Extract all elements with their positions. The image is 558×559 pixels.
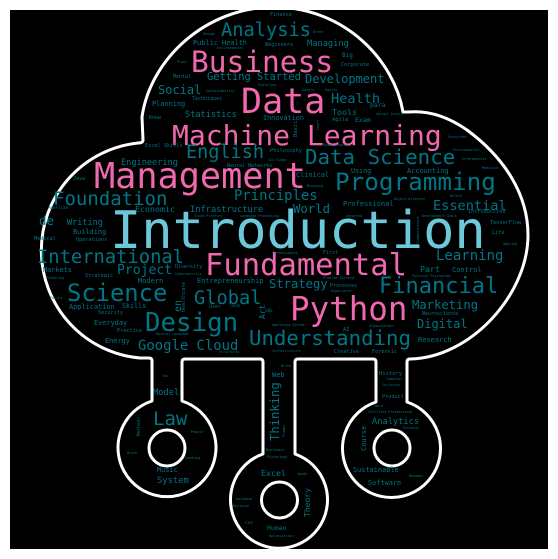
teal words: small: Software (368, 479, 401, 487)
teal words: tiny: History (379, 371, 403, 377)
teal words: tiny: AI (343, 327, 350, 333)
teal words: tiny: Techniques (192, 96, 222, 102)
teal words: medium: Learning (436, 248, 503, 264)
teal words: micro: Experience (331, 289, 351, 293)
teal words: micro: Sustainability (206, 89, 235, 93)
teal words: tiny: Processes (330, 283, 357, 289)
teal words: tiny: Excel Skills (145, 143, 182, 149)
teal words: micro: Ecosystem (448, 135, 466, 139)
teal words: small: Everyday (94, 319, 127, 327)
teal words: micro: Equity (325, 88, 337, 92)
teal words: tiny: Know (149, 115, 162, 121)
teal words: medium: Strategy (269, 277, 328, 291)
teal words: micro: Medicine (482, 166, 498, 170)
teal words: small: System (157, 476, 189, 486)
teal words: small: Professional (343, 200, 394, 208)
teal words: micro: Applied (503, 242, 517, 246)
teal words: small: Economic (135, 204, 175, 214)
teal words: small: Statistics (185, 110, 237, 120)
teal words: micro: Natural Language (156, 332, 189, 336)
teal words: small: Building (73, 228, 106, 236)
teal words: micro: Plant (177, 60, 187, 64)
pink word: Data: Data (241, 82, 325, 122)
teal words: small: para (370, 101, 386, 109)
pink word: Fundamental: Fundamental (205, 248, 407, 283)
teal words: tiny: Neural Networks (227, 163, 272, 169)
teal words: medium: Principles (234, 188, 318, 204)
teal words: small: Writing (67, 218, 103, 228)
teal words: micro: Language Processing (240, 214, 279, 218)
teal words: micro: Cloud Platform (194, 214, 223, 218)
teal words: medium (37, 20, 507, 441)
teal words: small: Excel (261, 468, 286, 478)
teal words: medium: Project (117, 263, 172, 278)
teal words: tiny: Mental (173, 74, 191, 80)
teal words: tiny: Basic (293, 120, 299, 137)
teal words: micro: Object-Oriented (394, 197, 425, 201)
teal words: small: Clinical (296, 171, 329, 179)
teal words: medium: Law (153, 408, 188, 430)
teal words: micro: Six Sigma (268, 158, 286, 162)
teal words: micro: Optimization (269, 534, 294, 538)
teal words: small: Analytics (372, 417, 419, 427)
teal words: small: Accounting (407, 167, 448, 175)
teal words: small: Web (272, 371, 285, 379)
teal words: tiny: Diversity (175, 264, 202, 270)
teal words: micro: Environmental (217, 46, 244, 50)
teal words: micro: Problem Solving (323, 276, 354, 280)
teal words: tiny: Beginners (265, 42, 293, 48)
teal words: small: Art (258, 304, 267, 319)
teal words: medium: Understanding (249, 326, 411, 350)
teal words: small: Energy (105, 337, 130, 345)
teal words: micro: Manager (409, 474, 423, 478)
teal words: micro: Advanced (346, 214, 362, 218)
teal words: small: Innovation (263, 114, 304, 122)
teal words: small: Human (267, 524, 287, 532)
teal words: micro: Preparing (46, 276, 64, 280)
pink word: Python: Python (290, 290, 407, 328)
teal words: micro: Certified Professional (368, 410, 413, 414)
teal words: micro: Google (302, 88, 314, 92)
teal words: micro: Intermediate (462, 157, 486, 161)
teal words: micro: Delete (450, 194, 462, 198)
teal words: micro: Communication (416, 216, 420, 243)
pink word: Business: Business (191, 45, 333, 79)
teal words: tiny: con (245, 521, 253, 526)
teal words: small (43, 39, 482, 532)
teal words: small: Model (153, 388, 179, 398)
teal words: micro: Write (281, 364, 291, 368)
teal words: medium: World (293, 202, 330, 216)
teal words: medium: Social (158, 83, 201, 97)
teal words: micro: Policy (50, 296, 62, 300)
teal words: small: Entrepreneurship (197, 277, 263, 285)
teal words: medium: Data Science (305, 145, 455, 169)
teal words: micro: Becoming (307, 184, 323, 188)
teal words: small: Control (452, 266, 482, 274)
teal words: tiny: Neuroscience (422, 311, 458, 317)
teal words: micro: Environmental (453, 148, 480, 152)
teal words: micro: Positive Psychology (412, 274, 451, 278)
teal words: tiny: Life (492, 230, 504, 236)
teal words: medium: International (37, 247, 184, 268)
teal words: micro: Structures (219, 350, 239, 354)
teal words: tiny: Agile (332, 117, 349, 123)
teal words: medium: Foundation (53, 188, 167, 210)
teal words: tiny: Java (73, 176, 85, 182)
teal words: small: Public Health (193, 39, 247, 47)
teal words: tiny: Introducción (468, 208, 505, 215)
teal words: micro: Infrastructure (272, 349, 301, 353)
teal words: tiny: First (323, 250, 338, 256)
teal words: small: Theory (303, 488, 312, 517)
teal words: medium: Thinking (268, 382, 282, 441)
teal words: tiny: Security (98, 310, 123, 316)
pink word: Management: Management (94, 156, 306, 197)
teal words: tiny: Forensic (372, 349, 397, 355)
teal words: small: Course (360, 426, 368, 451)
teal words: medium: Global (194, 288, 262, 309)
teal words: micro: Design (203, 32, 215, 36)
teal words: tiny: American (48, 205, 69, 210)
teal words: tiny: User (209, 304, 221, 310)
teal words: tiny: Healthcare (181, 282, 187, 312)
teal words: micro: Cybersecurity (175, 272, 202, 276)
teal words: micro: Personal (403, 426, 419, 430)
teal words: medium: Design (145, 308, 238, 338)
headline word: Introduction: Introduction (110, 201, 486, 261)
teal words: micro: Exploring (258, 83, 276, 87)
teal words: micro: Database (236, 497, 252, 501)
teal words: micro: Drone (313, 30, 323, 34)
teal words: medium: Health (331, 91, 380, 107)
teal words: tiny: Creative (334, 349, 359, 355)
teal words: tiny: TensorFlow (490, 220, 522, 226)
teal words: small: Planning (152, 100, 185, 108)
teal words: micro: Prompt (282, 425, 286, 437)
teal words: micro: Tax (162, 374, 168, 378)
teal words: micro: Organization (369, 324, 394, 328)
teal words: medium: Analysis (221, 20, 311, 41)
teal words: micro: Social Justice (376, 112, 405, 116)
teal words: micro: Development Goals (422, 214, 457, 218)
teal words: micro: Brain (127, 451, 137, 455)
teal words: tiny: Product (382, 394, 404, 400)
teal words: micro: People (191, 430, 203, 434)
teal words: medium: de (39, 213, 54, 228)
teal words: medium: Financial (379, 274, 498, 299)
teal words: micro: Decision (233, 504, 249, 508)
teal words: tiny: Philosophy (270, 148, 302, 154)
teal words: micro: Word (375, 404, 383, 408)
teal words: tiny: Finance (270, 12, 292, 18)
teal words: small: Research (418, 336, 452, 344)
teal words: tiny: Practice (117, 328, 142, 334)
teal words: medium: Essential (433, 198, 507, 214)
teal words: medium: Digital (417, 317, 468, 331)
teal words: small: Engineering (121, 158, 178, 168)
teal words: micro: Teaching (184, 456, 200, 460)
teal words: small: Music (157, 466, 178, 474)
teal words: small: Sustainable (353, 466, 399, 474)
pink word: Machine Learning: Machine Learning (172, 119, 442, 152)
teal words: small: Markets (43, 266, 72, 274)
teal words: medium: Getting Started (207, 71, 301, 83)
teal words: micro: Technologies (273, 251, 298, 255)
teal words: tiny: Medical (34, 236, 56, 242)
teal words: medium: Marketing (412, 298, 478, 312)
teal words: micro: Diplomacy (266, 448, 284, 452)
teal words: small: Managing (307, 39, 349, 49)
teal words: medium: Science (67, 279, 167, 307)
teal words: medium: Programming (335, 167, 496, 196)
teal words: tiny: Strategic (85, 273, 113, 279)
teal words: micro: COVID (230, 304, 240, 308)
teal words: small: Modern (138, 277, 163, 285)
teal words: micro: Inclusion (382, 383, 400, 387)
teal words: small: Tools (332, 107, 357, 117)
teal words: micro: Speak (297, 472, 307, 476)
teal words: medium: Development (305, 72, 384, 86)
teal words: small: Using (351, 167, 371, 175)
teal words: small: Exam (355, 116, 371, 124)
teal words: micro: Operating System (272, 323, 305, 327)
teal words: micro: Learn (316, 120, 320, 130)
teal words: micro (46, 30, 517, 538)
teal words: small: Skills (122, 302, 146, 310)
teal words: small: Infrastructure (190, 205, 263, 215)
teal words: micro: Human Rights (323, 143, 348, 147)
teal words: medium: Google Cloud (138, 338, 238, 354)
teal words: tiny: Methods (136, 417, 142, 436)
teal words: micro: Psychology (267, 455, 287, 459)
teal words: tiny: Corporate (341, 62, 369, 68)
teal words: small: Big (342, 52, 353, 59)
teal words: small: Application (69, 303, 115, 311)
teal words: micro: Computer (386, 377, 402, 381)
teal words: tiny: Operations (76, 237, 107, 243)
teal words: tiny: SQL (265, 308, 273, 314)
teal words: small: Part (420, 264, 440, 274)
teal words: medium: en (173, 300, 184, 312)
teal words: medium: English (186, 142, 264, 163)
